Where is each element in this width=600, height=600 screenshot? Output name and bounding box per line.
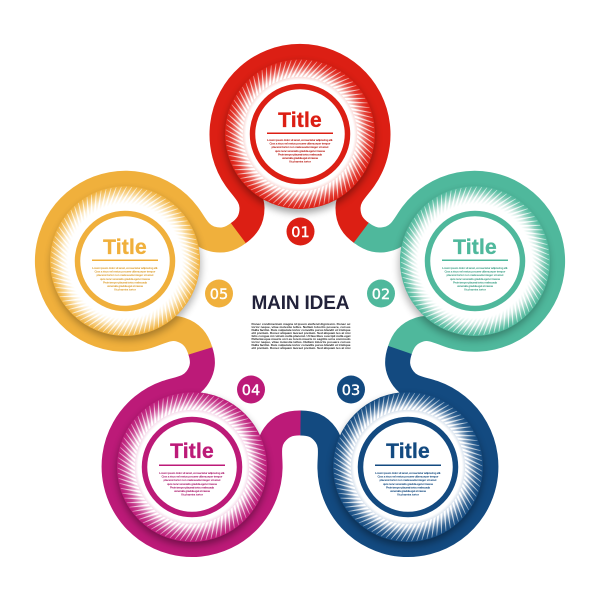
main paragraph: Nulla facilisi. Duis vulputate tortor convallis purus blandit ut tristique <box>252 328 351 332</box>
badge 05 <box>205 280 233 308</box>
yellow title: Title <box>103 236 147 259</box>
red body text <box>267 138 333 164</box>
teal body text: Lorem ipsum dolor sit amet, consectetur adipiscing elit. <box>442 266 508 270</box>
main paragraph: tortor neque, vitae molestie tellus. Nullam lobortis posuere, cursus <box>252 325 351 329</box>
badge 01 <box>286 218 314 246</box>
main paragraph: felis congue mi rutrum nulla placerat. Ut faucibus suscipit nulla eget <box>252 334 350 338</box>
teal body text: placerat tortor non malesuada integer sit amet <box>446 273 504 277</box>
teal body text: Cras a risus vel metus posuere ullamcorper tempor <box>444 270 506 274</box>
blue ribbon band <box>287 341 517 575</box>
blue hatched disc <box>310 372 506 562</box>
main paragraph: Pellentesque mauris orci eu lorem mauris in sagittis urna commodo <box>252 337 351 341</box>
blue rule <box>375 464 441 466</box>
red body text: Ut pharetra tortor <box>289 160 312 164</box>
badge 05: 05 <box>210 287 228 303</box>
main paragraph: Nulla facilisi. Duis vulputate tortor convallis purus blandit ut tristique <box>252 343 351 347</box>
red body text: quis nunc venenatis gravida eget et massa <box>275 149 325 153</box>
blue inner ring <box>360 420 456 514</box>
yellow body text: Proin tempor placerat tortor. malesuada <box>103 280 147 284</box>
blue body text: Cras a risus vel metus posuere ullamcorper tempor <box>378 475 439 479</box>
magenta inner ring <box>144 420 240 514</box>
teal disc shadow <box>399 190 549 340</box>
teal body text: quis nunc venenatis gravida eget et massa <box>450 277 500 281</box>
red hatched disc <box>202 39 398 229</box>
panel: 01 red node <box>202 39 398 233</box>
red body text: placerat tortor non malesuada integer sit amet <box>272 145 329 149</box>
teal rule <box>442 260 508 261</box>
yellow ribbon band <box>27 163 244 366</box>
main paragraph: elit pretium. Donec aliquam laoreet pretium. Sed aliquam leo at nisi <box>252 346 351 350</box>
main heading: MAIN IDEA <box>252 293 350 314</box>
blue body text: Proin tempor placerat tortor. malesuada <box>386 485 430 489</box>
yellow inner ring <box>78 214 172 308</box>
main paragraph <box>252 322 351 350</box>
teal title: Title <box>453 236 497 259</box>
yellow disc shadow <box>51 190 201 340</box>
blue body text: Lorem ipsum dolor sit amet, consectetur adipiscing elit. <box>375 471 441 475</box>
teal body text: Ut pharetra tortor <box>464 288 487 292</box>
magenta body text: quis nunc venenatis gravida eget et massa <box>167 482 217 486</box>
magenta body text: Cras a risus vel metus posuere ullamcorper tempor <box>162 475 223 479</box>
blue body text: Ut pharetra tortor <box>397 493 420 497</box>
blue title: Title <box>386 440 430 463</box>
magenta body text: Proin tempor placerat tortor. malesuada <box>170 485 214 489</box>
magenta rule <box>159 464 225 466</box>
yellow rule <box>92 260 158 261</box>
badge 01: 01 <box>291 225 310 241</box>
teal ribbon band <box>356 163 573 366</box>
badge 02 <box>367 280 395 308</box>
panel: 05 yellow node <box>27 163 244 366</box>
red body text: Proin tempor placerat tortor. malesuada <box>278 152 322 156</box>
yellow body text: placerat tortor non malesuada integer sit amet <box>96 273 154 277</box>
red inner ring <box>252 86 348 182</box>
main paragraph: Donec condimentum magna id ipsum eleifend dignissim. Donec ac <box>252 322 351 326</box>
panel: 02 teal node <box>356 163 573 366</box>
red rule <box>267 132 333 134</box>
teal body text: venenatis gravida eget et massa <box>457 284 493 288</box>
yellow body text: Cras a risus vel metus posuere ullamcorper tempor <box>94 270 156 274</box>
magenta disc shadow <box>117 396 267 546</box>
magenta body text <box>159 471 225 497</box>
blue body text: quis nunc venenatis gravida eget et massa <box>383 482 433 486</box>
red ribbon band <box>222 56 378 233</box>
yellow body text: Ut pharetra tortor <box>114 288 137 292</box>
red disc shadow <box>225 63 375 213</box>
panel: 03 blue node <box>287 341 517 575</box>
magenta body text: Ut pharetra tortor <box>181 493 204 497</box>
badge 04: 04 <box>242 383 260 399</box>
teal inner ring <box>428 214 522 308</box>
magenta title: Title <box>170 440 214 463</box>
magenta hatched disc <box>94 372 290 562</box>
blue body text <box>375 471 441 497</box>
panel: 04 magenta node <box>83 341 313 575</box>
yellow body text: quis nunc venenatis gravida eget et massa <box>100 277 150 281</box>
main paragraph: elit pretium. Donec aliquam laoreet pretium. Sed aliquam leo at nisi <box>252 331 351 335</box>
red body text: Lorem ipsum dolor sit amet, consectetur adipiscing elit. <box>267 138 333 142</box>
magenta ribbon band <box>83 341 313 575</box>
badge 02: 02 <box>372 287 390 303</box>
yellow body text <box>92 266 158 292</box>
teal body text: Proin tempor placerat tortor. malesuada <box>453 280 497 284</box>
teal body text <box>442 266 508 292</box>
yellow hatched disc <box>27 166 223 356</box>
red title: Title <box>278 109 322 132</box>
magenta body text: venenatis gravida eget et massa <box>174 489 210 493</box>
badge 04 <box>237 376 265 404</box>
red body text: Cras a risus vel metus posuere ullamcorper tempor <box>270 142 331 146</box>
magenta body text: Lorem ipsum dolor sit amet, consectetur adipiscing elit. <box>159 471 225 475</box>
blue body text: placerat tortor non malesuada integer sit amet <box>380 478 437 482</box>
teal hatched disc <box>377 166 573 356</box>
badge 03: 03 <box>342 383 360 399</box>
badge 03 <box>337 376 365 404</box>
blue body text: venenatis gravida eget et massa <box>390 489 426 493</box>
yellow body text: venenatis gravida eget et massa <box>107 284 143 288</box>
magenta body text: placerat tortor non malesuada integer sit amet <box>164 478 221 482</box>
red body text: venenatis gravida eget et massa <box>282 156 318 160</box>
main paragraph: tortor neque, vitae molestie tellus. Nullam lobortis posuere cursus <box>252 340 351 344</box>
blue disc shadow <box>333 396 483 546</box>
yellow body text: Lorem ipsum dolor sit amet, consectetur adipiscing elit. <box>92 266 158 270</box>
